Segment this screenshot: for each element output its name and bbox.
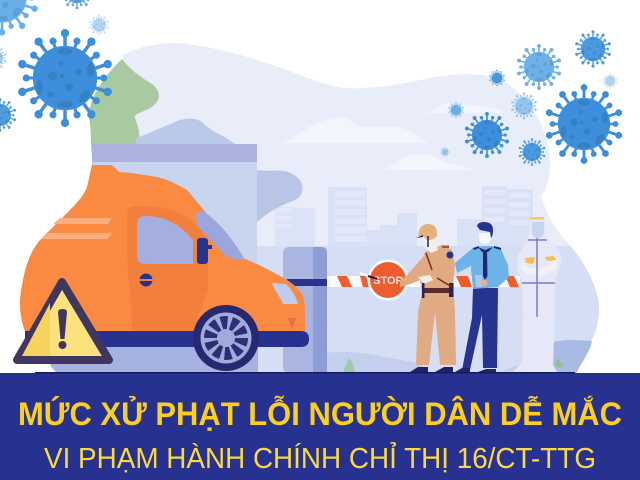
- truck side window: [137, 216, 193, 264]
- belt: [423, 288, 453, 293]
- background blob: [120, 43, 599, 373]
- virus tiny: [440, 147, 450, 157]
- suit zip lines: [522, 238, 555, 317]
- plant right: [555, 357, 563, 368]
- virus top right: [575, 30, 611, 68]
- virus edge faded: [0, 46, 7, 70]
- epaulette: [442, 246, 449, 248]
- plant left: [343, 358, 355, 372]
- virus pale mid: [511, 93, 537, 119]
- city skyline: [275, 186, 533, 256]
- tie: [483, 250, 488, 280]
- virus top left: [0, 0, 38, 35]
- shoulder strap: [426, 253, 452, 287]
- paper and hand: [475, 275, 482, 287]
- hill right of building: [257, 170, 303, 222]
- building: [92, 144, 257, 373]
- white glove: [418, 275, 433, 284]
- virus group left: [0, 0, 112, 132]
- collar and face: [425, 240, 438, 253]
- truck door: [127, 206, 208, 331]
- hill behind building: [136, 118, 235, 144]
- shoes: [455, 368, 496, 372]
- main title: MỨC XỬ PHẠT LỖI NGƯỜI DÂN DỄ MẮC: [18, 396, 622, 432]
- truck underbody shadow: [45, 347, 258, 373]
- virus top small: [60, 0, 94, 9]
- truck stripes: [41, 218, 112, 239]
- tail marker: [288, 318, 296, 329]
- barrier post: [283, 247, 327, 373]
- collar: [478, 247, 493, 252]
- face and mask: [479, 233, 491, 244]
- virus large right: [546, 84, 622, 164]
- virus edge low: [0, 98, 16, 132]
- arm on shoulder: [455, 248, 473, 273]
- barrier pole: [287, 276, 520, 287]
- virus group right: [440, 30, 622, 166]
- traffic police: [400, 224, 456, 372]
- stop sign: STOP: [373, 275, 403, 287]
- virus pale right: [603, 73, 617, 89]
- chassis bar: [25, 331, 309, 347]
- security guard: [455, 222, 509, 372]
- clouds: [283, 103, 507, 170]
- gloves: [525, 256, 557, 264]
- shoes: [410, 367, 453, 372]
- epaulettes: [473, 246, 501, 250]
- helmet: [418, 224, 437, 240]
- shoulder badge: [446, 252, 454, 258]
- hazmat worker: [513, 217, 562, 372]
- windshield: [196, 212, 245, 260]
- shirt: [471, 246, 509, 289]
- virus centre: [465, 112, 509, 158]
- truck body: [20, 165, 305, 331]
- wheel: [193, 305, 259, 371]
- tunic and trousers: [400, 245, 456, 365]
- trousers: [462, 288, 498, 370]
- virus lower: [519, 138, 545, 166]
- title banner: [0, 372, 640, 480]
- exclamation mark: [58, 309, 67, 349]
- ground band: [257, 246, 600, 373]
- stop sign: [360, 260, 408, 300]
- hood: [528, 219, 547, 240]
- virus light upper: [517, 44, 561, 90]
- virus pale: [89, 15, 109, 35]
- virus small mid: [448, 102, 464, 118]
- truck: [20, 165, 309, 373]
- face shield: [532, 222, 544, 238]
- crossed arms: [521, 256, 558, 276]
- virus small: [489, 70, 505, 86]
- suit: [513, 238, 562, 372]
- mirror: [197, 238, 208, 264]
- headlight: [272, 283, 298, 304]
- green bush behind truck: [88, 59, 159, 155]
- subtitle: VI PHẠM HÀNH CHÍNH CHỈ THỊ 16/CT-TTG: [44, 442, 596, 475]
- warning sign: [17, 282, 109, 360]
- virus large left: [18, 29, 112, 127]
- door handle: [139, 274, 153, 286]
- hair: [477, 222, 493, 238]
- lower hills: [327, 340, 592, 373]
